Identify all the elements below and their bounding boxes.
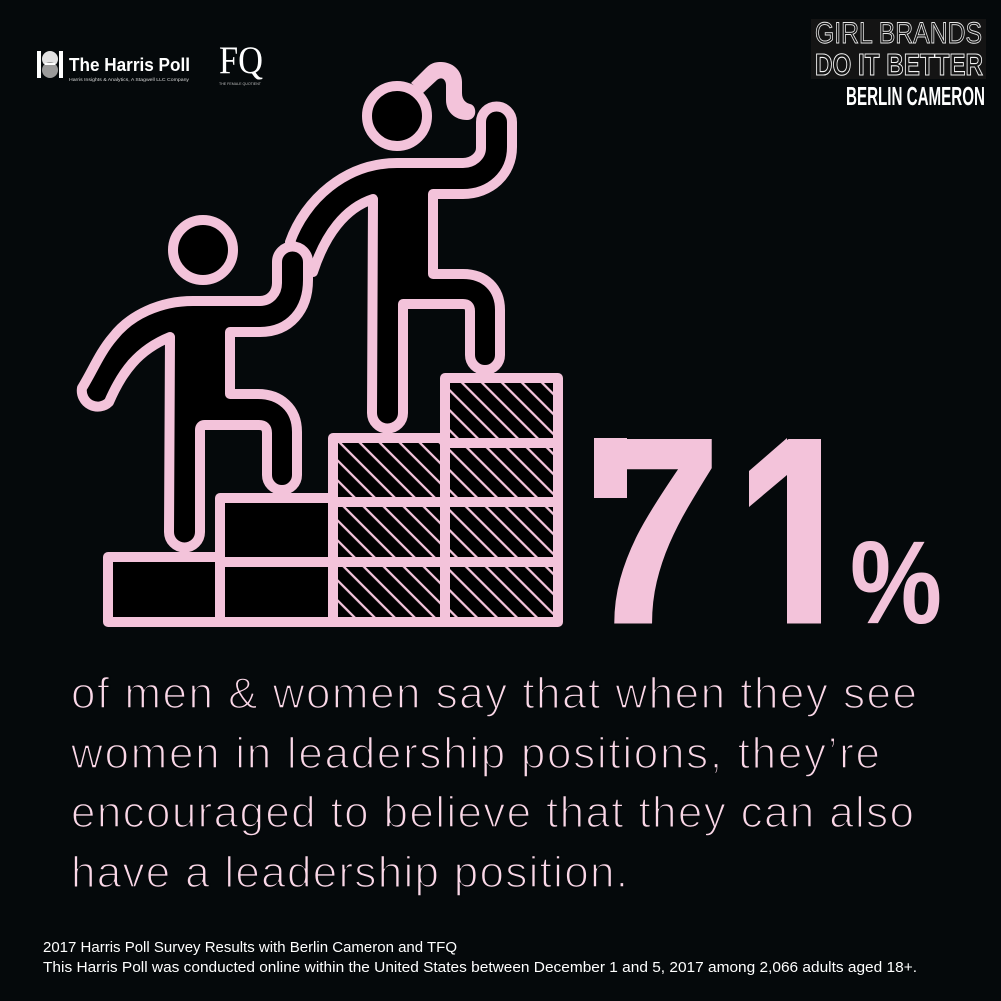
- Harris Poll wordmark: The Harris Poll: [69, 55, 190, 75]
- body: [82, 246, 308, 547]
- figure: taller woman with ponytail: [290, 62, 512, 428]
- step outlines: [108, 378, 558, 622]
- illustration: two figures climbing steps: [82, 62, 558, 622]
- digit 7: [594, 438, 712, 624]
- line 1: of men & women say that when they see: [71, 669, 917, 718]
- steps: [108, 378, 558, 622]
- neon sign backdrop: [811, 19, 986, 79]
- footnote line 1: 2017 Harris Poll Survey Results with Berlin Cameron and TFQ: [43, 939, 457, 956]
- line 3: encouraged to believe that they can also: [71, 788, 914, 837]
- logo: FQ: [219, 39, 263, 86]
- FQ tagline: THE FEMALE QUOTIENT: [219, 82, 262, 86]
- line 2: women in leadership positions, they’re: [70, 729, 880, 778]
- line 4: have a leadership position.: [71, 848, 628, 897]
- figure: shorter person being helped: [82, 220, 308, 547]
- icon: Harris Poll mark: [37, 51, 63, 78]
- logo: The Harris Poll: [37, 51, 190, 82]
- body: [290, 106, 512, 428]
- head: [173, 220, 233, 280]
- head: [367, 86, 427, 146]
- digit 1: [749, 438, 821, 624]
- hatched step blocks: [333, 438, 445, 622]
- solid step blocks: [108, 557, 333, 622]
- digit 7: 7: [576, 382, 723, 681]
- statistic: 71%: [594, 438, 940, 624]
- footnote line 2: This Harris Poll was conducted online within the United States between December 1 and 5, 2017 among 2,066 adults aged 18+.: [43, 959, 917, 976]
- logo: Girl Brands Do It Better, Berlin Cameron: [811, 17, 986, 111]
- percent sign: %: [850, 517, 942, 649]
- body text: [70, 669, 917, 897]
- source footnote: [43, 939, 917, 976]
- FQ wordmark: FQ: [219, 39, 263, 82]
- ponytail: [411, 62, 475, 120]
- digit 1: 1: [725, 382, 872, 681]
- Harris Poll tagline: Harris Insights & Analytics, A Stagwell LLC Company: [69, 77, 190, 82]
